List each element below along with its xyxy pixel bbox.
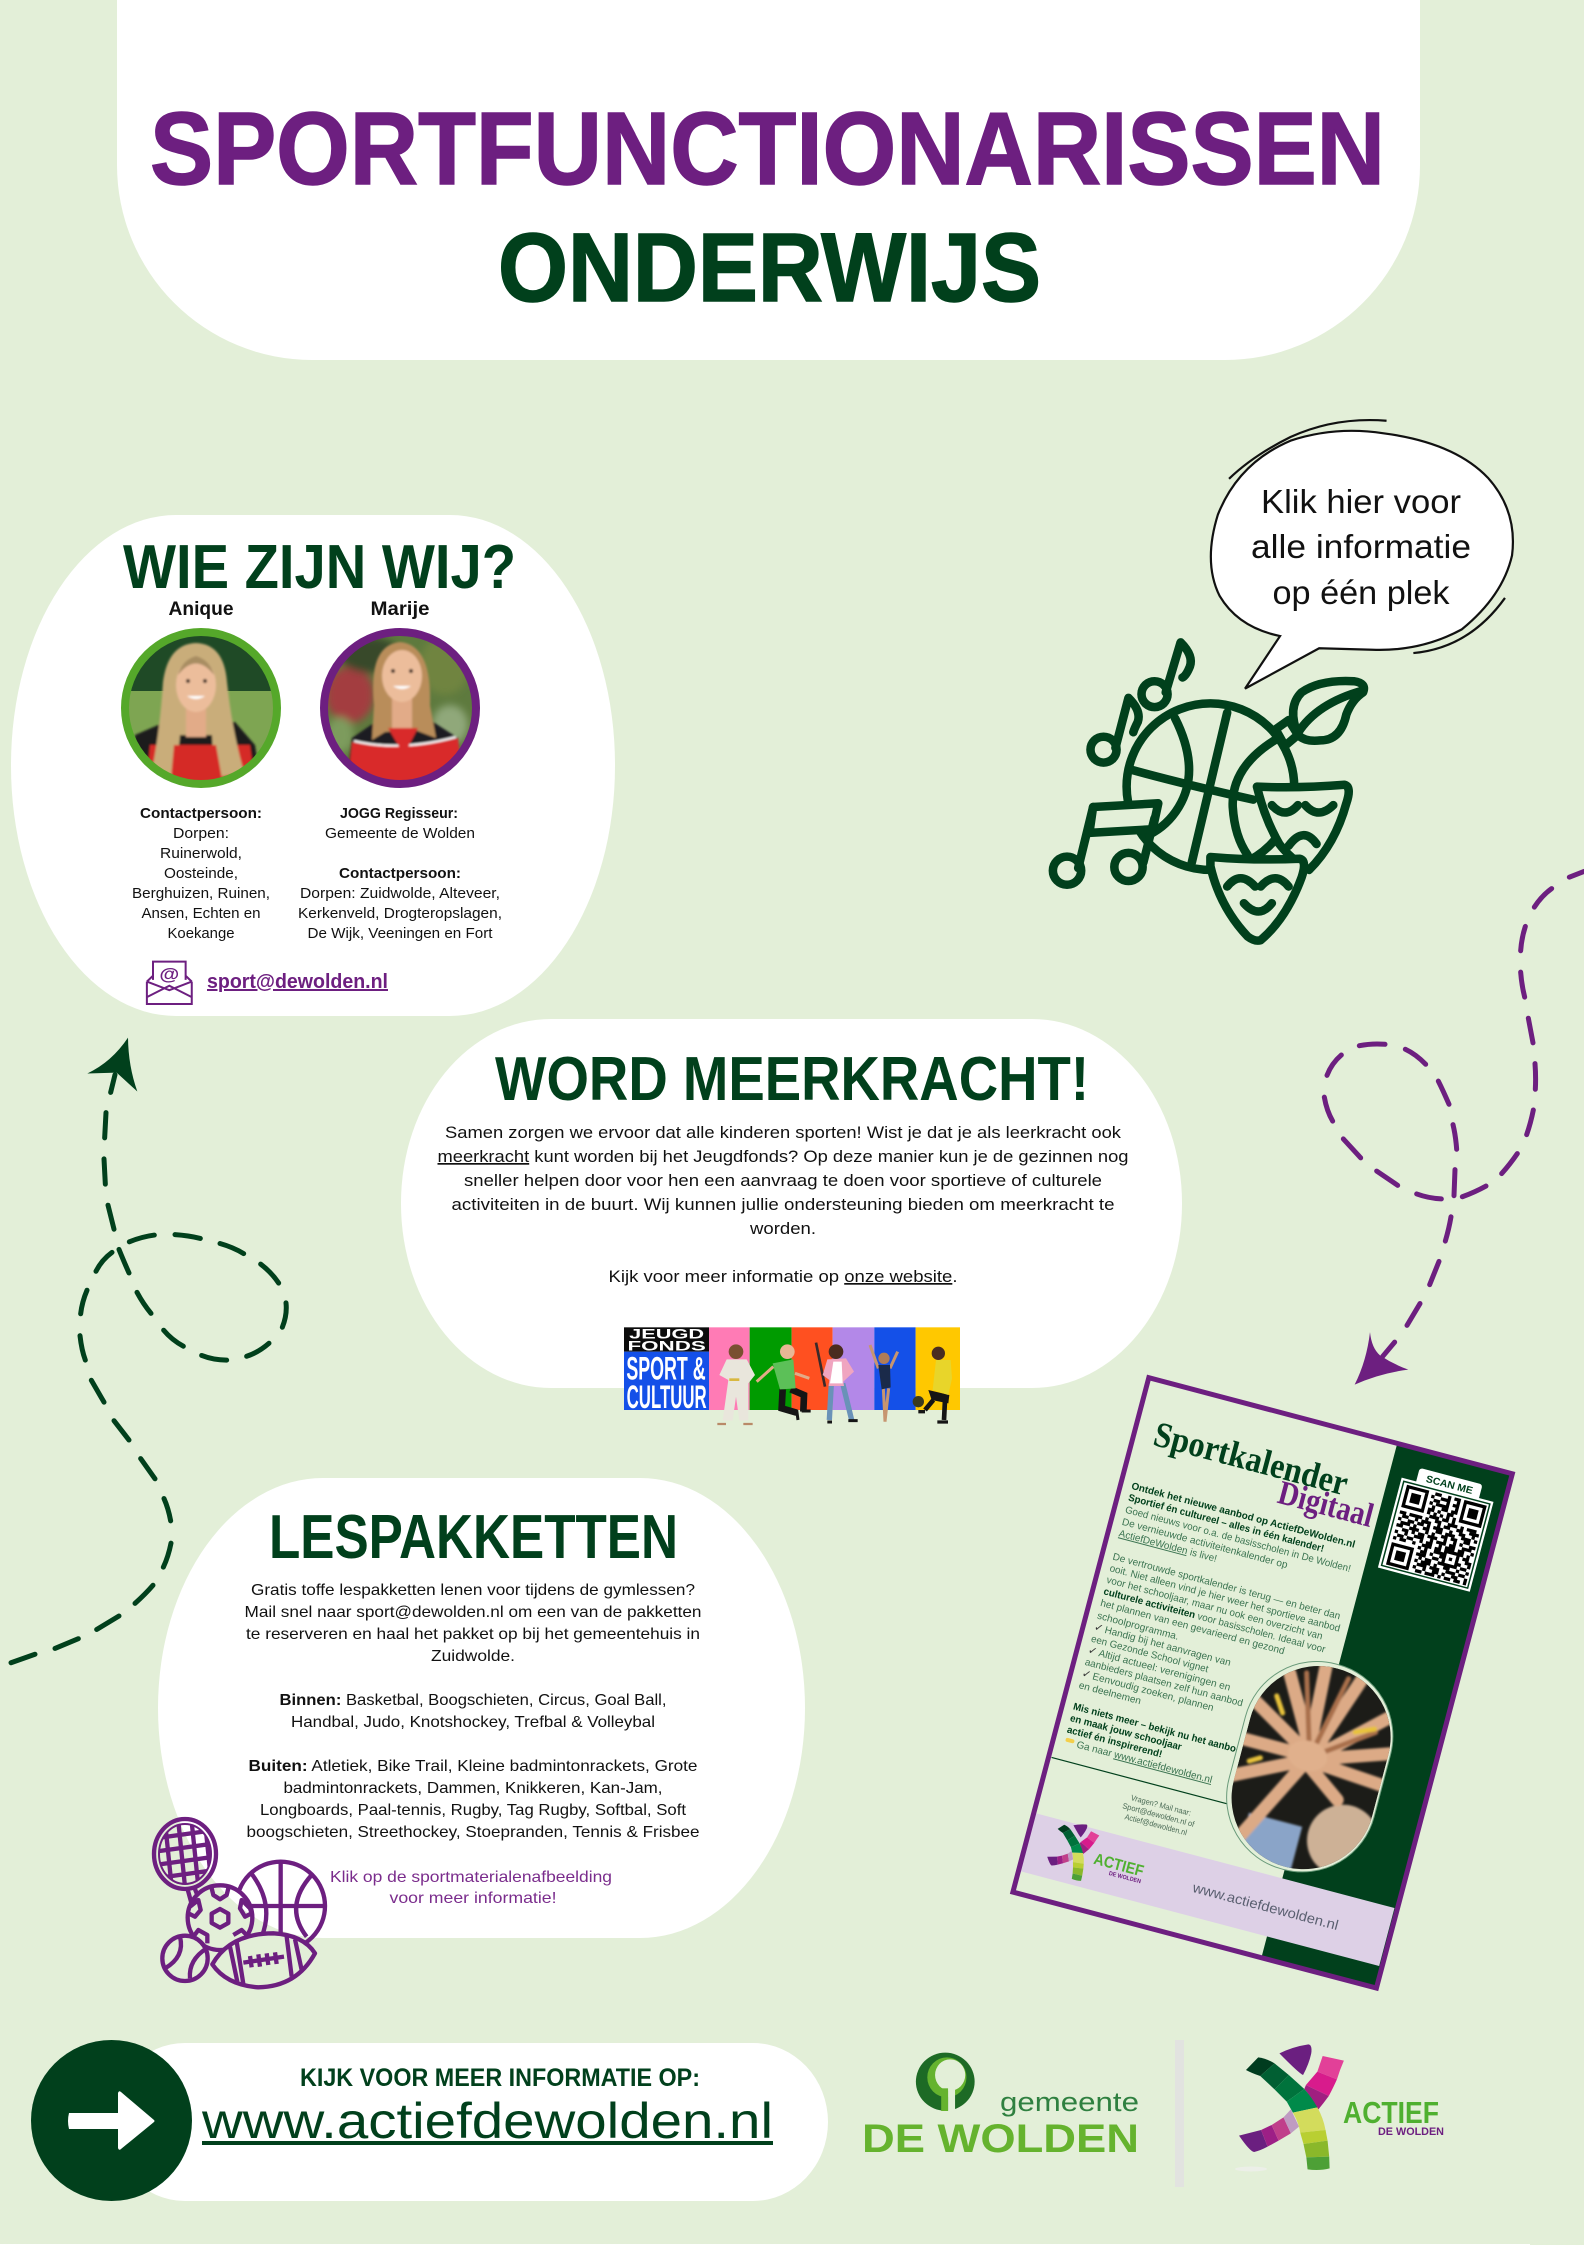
flyer intro text: De vernieuwde activiteitenkalender op (1121, 1517, 1289, 1571)
icon: sports balls (154, 1819, 325, 1987)
text: Anique contact: Koekange (168, 925, 234, 942)
photo: Marije (320, 630, 485, 790)
kid: judo (717, 1344, 755, 1424)
flyer logo: ACTIEF (1092, 1851, 1146, 1880)
title line 2: ONDERWIJS (498, 213, 1041, 322)
kid: stick (816, 1343, 858, 1422)
text: meerkracht body: sneller helpen door voor hen een aanvraag te doen voor sportieve of culturele (464, 1171, 1102, 1190)
flyer body text: het plannen van een gevarieerd en gezond (1099, 1598, 1286, 1657)
link: email: sport@dewolden.nl (207, 971, 388, 993)
text: Anique contact: Ruinerwold, (160, 845, 242, 862)
kid: green shirt (757, 1344, 811, 1420)
text: speech bubble: alle informatie (1251, 528, 1471, 565)
text: Marije contact: JOGG Regisseur: (340, 805, 458, 822)
happy mask (1210, 857, 1304, 941)
text: buiten (246, 1758, 700, 1841)
text: binnen: Handbal, Judo, Knotshockey, Trefbal & Volleybal (291, 1714, 655, 1731)
text: Anique contact: Contactpersoon: (140, 805, 262, 822)
flyer body text: voor het schooljaar, maar nu ook een overzicht van (1105, 1575, 1324, 1642)
racket (154, 1819, 216, 1904)
text: buiten: badmintonrackets, Dammen, Knikkeren, Kan-Jam, (284, 1780, 662, 1797)
photo: Anique (120, 630, 285, 791)
kid: gymnast (870, 1345, 898, 1422)
icon: envelope: @ (159, 964, 179, 984)
text: meerkracht body (438, 1123, 1128, 1286)
icon: sport and culture (1053, 642, 1364, 941)
flyer intro text: ActiefDeWolden is live! (1118, 1528, 1218, 1565)
text: Anique contact: Dorpen: (173, 825, 229, 842)
logo: jeugdfonds banner: FONDS (627, 1337, 706, 1353)
cta heading: KIJK VOOR MEER INFORMATIE OP: (300, 2064, 700, 2092)
text: buiten: Buiten: Atletiek, Bike Trail, Kleine badmintonrackets, Grote (248, 1758, 698, 1775)
logo: gemeente de wolden: DE WOLDEN (862, 2117, 1139, 2161)
logo ring (916, 2053, 975, 2111)
text: speech bubble: Klik hier voor (1261, 483, 1461, 520)
logo: actief de wolden: ACTIEF (1343, 2095, 1439, 2130)
text: Anique contact (132, 805, 270, 942)
flyer title: Sportkalender (1150, 1414, 1352, 1503)
panel: word meerkracht (401, 1019, 1182, 1388)
sad mask (1257, 785, 1349, 870)
text: lespakketten intro: te reserveren en haal het pakket op bij het gemeentehuis in (246, 1626, 700, 1643)
panel: sportkalender flyer (1013, 1378, 1512, 1988)
tennis ball (162, 1936, 208, 1981)
logo: gemeente de wolden (862, 2053, 1139, 2161)
soccer ball (188, 1885, 252, 1950)
logo: jeugdfonds banner: CULTUUR (627, 1378, 707, 1415)
text: Marije contact: Dorpen: Zuidwolde, Alteveer, (300, 885, 500, 902)
text: binnen: Binnen: Basketbal, Boogschieten, Circus, Goal Ball, (280, 1692, 666, 1709)
text: Marije contact: Gemeente de Wolden (325, 825, 475, 842)
flyer contact: Vragen? Mail naar: (1130, 1793, 1192, 1818)
flyer body text: en deelnemen (1077, 1680, 1142, 1707)
flyer contact: Sport@dewolden.nl of (1121, 1801, 1196, 1829)
name: Anique: Anique (168, 599, 234, 620)
flyer intro text (1118, 1481, 1358, 1599)
flyer body text: een Gezonde School vignet (1090, 1634, 1210, 1675)
flyer body text: schoolprogramma. (1096, 1611, 1180, 1643)
flyer body text: Altijd actueel: verenigingen en (1097, 1648, 1232, 1694)
american football (212, 1933, 315, 1987)
text: meerkracht body: Kijk voor meer informatie op onze website . (609, 1267, 958, 1286)
heading: word meerkracht: WORD MEERKRACHT! (495, 1045, 1089, 1114)
text: Anique contact: Oosteinde, (164, 865, 238, 882)
flyer body text: Handig bij het aanvragen van (1103, 1625, 1232, 1669)
text: purple hint (330, 1869, 612, 1907)
flyer QR code: SCAN ME (1425, 1474, 1474, 1497)
text: meerkracht body: worden. (749, 1219, 816, 1238)
text: Marije contact: Kerkenveld, Drogteropslagen, (298, 905, 502, 922)
text: Anique contact: Ansen, Echten en (142, 905, 260, 922)
flyer closing text: Ga naar www.actiefdewolden.nl (1075, 1740, 1213, 1786)
text: Marije contact: Contactpersoon: (339, 865, 461, 882)
flyer QR code (1378, 1464, 1497, 1592)
text: lespakketten intro: Gratis toffe lespakketten lenen voor tijdens de gymlessen? (251, 1582, 695, 1599)
flyer intro text: Ontdek het nieuwe aanbod op ActiefDeWolden.nl (1130, 1481, 1356, 1551)
flyer body text: Eenvoudig zoeken, plannen (1091, 1671, 1215, 1714)
flyer body text: ooit. Niet alleen vind je hier weer het sportieve aanbod (1108, 1563, 1341, 1635)
panel: wie zijn wij (11, 515, 615, 1016)
flyer body text: ✓ (1081, 1667, 1093, 1682)
flyer contact (1119, 1792, 1199, 1839)
logo: gemeente de wolden: gemeente (1000, 2087, 1139, 2117)
flyer body text: De vertrouwde sportkalender is terug — en beter dan (1111, 1552, 1341, 1622)
title line 1: SPORTFUNCTIONARISSEN (150, 91, 1385, 206)
flyer subtitle: Digitaal (1274, 1474, 1377, 1535)
logo: jeugdfonds banner: SPORT & (626, 1349, 706, 1386)
flyer photo: hands (1226, 1661, 1394, 1872)
flyer body text: aanbieders plaatsen zelf hun aanbod (1084, 1657, 1244, 1709)
panel: title header (117, 0, 1420, 360)
flyer lilac band (1019, 1813, 1394, 1966)
flyer intro text: Sportief én cultureel – alles in één kalender! (1127, 1493, 1325, 1555)
text: purple hint: voor meer informatie! (390, 1890, 556, 1907)
flyer closing text (1063, 1701, 1243, 1791)
icon: envelope (147, 962, 192, 1004)
flyer body text: culturele activiteiten voor basisscholen. Ideaal voor (1102, 1586, 1327, 1656)
music notes (1053, 642, 1191, 885)
flyer logo: DE WOLDEN (1108, 1871, 1141, 1885)
text: lespakketten intro: Mail snel naar sport@dewolden.nl om een van de pakketten (244, 1604, 702, 1621)
text: purple hint: Klik op de sportmaterialenafbeelding (330, 1869, 612, 1886)
logo: jeugdfonds banner (624, 1325, 960, 1424)
flyer closing text: Mis niets meer – bekijk nu het aanbod (1072, 1701, 1243, 1757)
name: Marije: Marije (370, 599, 430, 620)
arrow: green dashed loop (11, 1038, 286, 1663)
panel: website call to action (110, 2043, 828, 2201)
text: meerkracht body: activiteiten in de buurt. Wij kunnen jullie ondersteuning bieden om meerkracht te (452, 1195, 1114, 1214)
basketball (1127, 703, 1294, 870)
text: binnen (280, 1692, 666, 1731)
heading: lespakketten: LESPAKKETTEN (269, 1503, 678, 1572)
flyer lilac band: www.actiefdewolden.nl (1190, 1879, 1340, 1933)
logo: jeugdfonds banner: JEUGD (629, 1325, 704, 1341)
flyer closing text: actief én inspirerend! (1066, 1725, 1163, 1760)
logo: actief de wolden (1235, 2044, 1444, 2172)
arrow: purple dashed loop (1324, 871, 1584, 1385)
text: meerkracht body: Samen zorgen we ervoor dat alle kinderen sporten! Wist je dat je als leerkracht ook (445, 1123, 1122, 1142)
callout: speech bubble (1211, 420, 1513, 689)
text: buiten: Longboards, Paal-tennis, Rugby, Tag Rugby, Softbal, Soft (260, 1802, 687, 1819)
logo: actief de wolden: DE WOLDEN (1378, 2126, 1444, 2138)
kid: football (913, 1347, 952, 1422)
flyer intro text: Goed nieuws voor o.a. de basisscholen in De Wolden! (1124, 1505, 1352, 1575)
text: buiten: boogschieten, Streethockey, Stoepranden, Tennis & Frisbee (246, 1824, 700, 1841)
flyer closing text: en maak jouw schooljaar (1069, 1713, 1183, 1753)
text: meerkracht body: meerkracht kunt worden bij het Jeugdfonds? Op deze manier kun je de gezinnen nog (438, 1147, 1128, 1166)
text: Anique contact: Berghuizen, Ruinen, (132, 885, 270, 902)
flyer logo (1043, 1817, 1152, 1896)
panel: lespakketten (158, 1478, 805, 1938)
paint brush (1276, 681, 1364, 746)
heading: wie zijn wij: WIE ZIJN WIJ? (123, 533, 516, 602)
text: lespakketten intro (244, 1582, 702, 1665)
flyer body text: ✓ (1087, 1643, 1099, 1658)
icon: arrow circle (31, 2040, 192, 2201)
text: lespakketten intro: Zuidwolde. (431, 1648, 515, 1665)
flyer body text (1077, 1552, 1344, 1752)
cta url: www.actiefdewolden.nl (201, 2093, 773, 2149)
flyer contact: Actief@dewolden.nl (1124, 1812, 1188, 1837)
flyer purple border (1013, 1378, 1512, 1988)
text: Marije contact: De Wijk, Veeningen en Fort (308, 925, 493, 942)
text: speech bubble: op één plek (1272, 574, 1450, 611)
basketball (236, 1862, 325, 1950)
text: speech bubble (1251, 483, 1471, 611)
text: Marije contact (298, 805, 502, 942)
flyer body text: ✓ (1093, 1620, 1105, 1635)
